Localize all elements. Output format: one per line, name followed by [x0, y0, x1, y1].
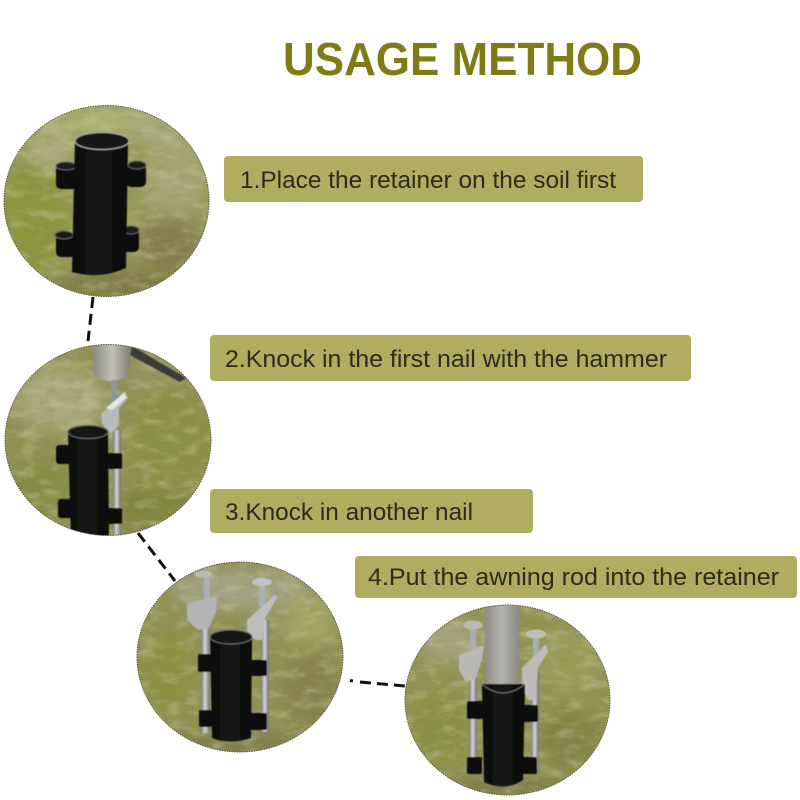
photo 1: retainer on soil: [0, 100, 215, 300]
photo 3: both nails driven in: [135, 560, 345, 757]
connector: step 2 to step 3: [138, 533, 175, 581]
connector: step 3 to step 4: [350, 680, 405, 686]
step 2 banner: 2.Knock in the first nail with the hammer: [225, 346, 667, 373]
step 2 banner: [210, 335, 691, 381]
title: USAGE METHOD: [283, 33, 642, 85]
step 4 banner: 4.Put the awning rod into the retainer: [368, 564, 779, 591]
photo 4: awning rod in retainer: [400, 600, 615, 800]
connector: step 1 to step 2: [88, 297, 93, 341]
photo 2: hammering first nail: [0, 340, 215, 540]
step 3 banner: 3.Knock in another nail: [225, 499, 473, 526]
step 1 banner: [224, 156, 643, 202]
step 1 banner: 1.Place the retainer on the soil first: [240, 167, 616, 194]
step 3 banner: [210, 489, 533, 533]
step 4 banner: [355, 556, 797, 598]
